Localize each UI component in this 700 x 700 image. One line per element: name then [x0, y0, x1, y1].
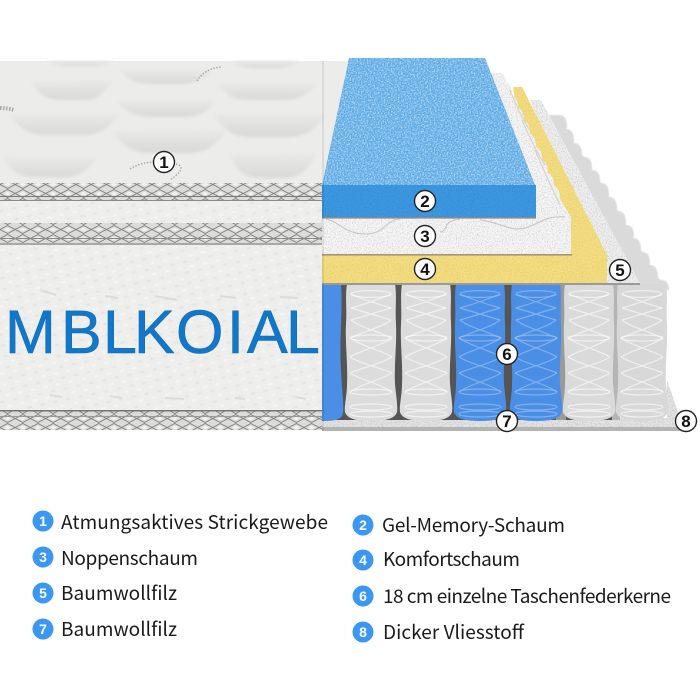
legend item 3: 3 [39, 549, 47, 565]
side panel [0, 61, 324, 431]
legend item 7: Baumwollfilz [61, 615, 177, 642]
upper border band [0, 183, 322, 245]
layer: egg-crate foam [322, 72, 571, 254]
badge 3 [414, 226, 436, 246]
legend item 8: Dicker Vliesstoff [383, 618, 525, 645]
legend item 7: 7 [39, 621, 47, 637]
grey spring 3 [563, 284, 615, 421]
grey spring 2 [400, 284, 452, 421]
grey spring 1 [345, 284, 397, 421]
legend item 4: Komfortschaum [383, 545, 520, 572]
base layer: thick fleece [322, 380, 682, 431]
layer: comfort foam [322, 87, 607, 283]
badge 7: 7 [502, 412, 512, 431]
brand name MBLKOIAL: MBLKOIAL [5, 298, 320, 366]
legend [32, 508, 671, 645]
badge 2 [414, 190, 436, 212]
legend item 2: Gel-Memory-Schaum [382, 511, 565, 538]
badge 7 [496, 410, 518, 432]
layer: cotton felt [322, 100, 640, 285]
badge 4 [414, 258, 436, 280]
badge 8 [676, 410, 696, 432]
blue spring 1 [454, 284, 506, 421]
legend item 8: 8 [359, 624, 367, 640]
mattress top quilted surface [0, 61, 348, 190]
lower border band [0, 410, 322, 430]
badge 6 [496, 344, 518, 364]
legend item 5: 5 [39, 585, 47, 601]
badge 5: 5 [615, 261, 625, 280]
mattress illustration [0, 58, 696, 432]
legend item 5: Baumwollfilz [61, 579, 177, 606]
badge 4: 4 [420, 260, 430, 279]
badge 6: 6 [502, 345, 512, 364]
badge 2: 2 [420, 192, 430, 211]
badge 1: 1 [159, 153, 169, 172]
grey spring 4 [616, 284, 668, 421]
legend item 2: 2 [359, 517, 367, 533]
layer: pocket springs [322, 284, 668, 421]
blue spring cut off [322, 284, 343, 421]
blue spring 2 [510, 284, 562, 421]
spring row top view [545, 115, 669, 290]
legend item 1: 1 [39, 513, 47, 529]
badge 8: 8 [681, 412, 691, 431]
legend item 3: Noppenschaum [61, 544, 198, 571]
badge 1 [154, 152, 174, 172]
legend item 1: Atmungsaktives Strickgewebe [61, 508, 328, 535]
badge 3: 3 [420, 227, 430, 246]
badge 5 [610, 260, 630, 280]
legend item 6: 18 cm einzelne Taschenfederkerne [383, 582, 671, 609]
layer: gel memory foam [322, 58, 536, 219]
legend item 4: 4 [359, 552, 367, 568]
legend item 6: 6 [359, 588, 367, 604]
